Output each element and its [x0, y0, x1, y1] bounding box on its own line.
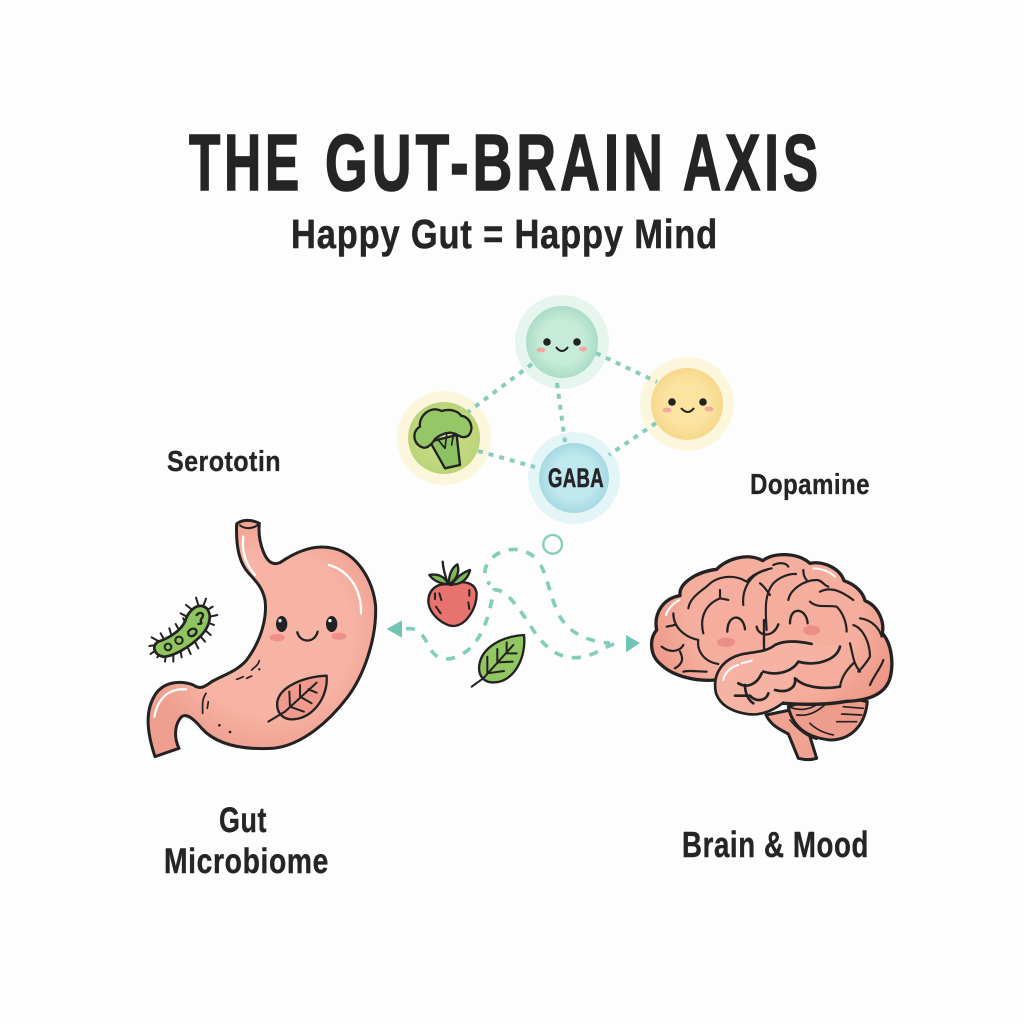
label: Gut Microbiome: Gut [219, 801, 267, 840]
subtitle: Happy Gut = Happy Mind [291, 211, 718, 257]
cerebrum [652, 555, 892, 704]
node: GABA: GABA [548, 463, 604, 493]
connector arrows between gut and brain [387, 535, 640, 659]
title: AXIS [683, 118, 822, 207]
label: Brain & Mood: Brain & Mood [682, 824, 869, 865]
label: Serototin: Serototin [167, 446, 281, 478]
surface marks [203, 661, 259, 713]
label: Dopamine: Dopamine [750, 469, 870, 501]
arrow: right to brain [626, 635, 640, 652]
face [727, 611, 808, 652]
stomach body [148, 520, 376, 757]
cerebellum [788, 693, 867, 740]
brain highlights [666, 568, 835, 680]
stomach character [148, 520, 376, 757]
temporal lobe [715, 642, 840, 714]
icon: bacterium [149, 598, 217, 662]
network of dashed connectors [468, 353, 657, 467]
path: curve from circle to brain [485, 549, 610, 643]
icon: broccoli [414, 409, 471, 468]
title: THE [189, 118, 303, 207]
highlights [154, 537, 361, 717]
face [276, 616, 287, 632]
leaf mark [277, 676, 327, 719]
brain character [652, 555, 892, 760]
node: yellow smiley [640, 357, 734, 451]
node: broccoli [397, 391, 491, 485]
title: GUT-BRAIN [325, 118, 667, 207]
label: Gut Microbiome: Microbiome [164, 842, 329, 881]
node: GABA [528, 432, 620, 524]
label: Gut Microbiome [164, 801, 329, 881]
arrow: left to gut [387, 620, 402, 638]
icon: strawberry [428, 562, 477, 626]
bacterium body [154, 606, 210, 657]
bacterium spikes [149, 598, 217, 662]
brain stem [766, 707, 817, 760]
path: curve from gut to brain [406, 590, 620, 659]
cerebrum folds [662, 563, 883, 687]
icon: leaf [472, 635, 524, 687]
node: green smiley [515, 295, 609, 389]
open circle [543, 535, 562, 554]
